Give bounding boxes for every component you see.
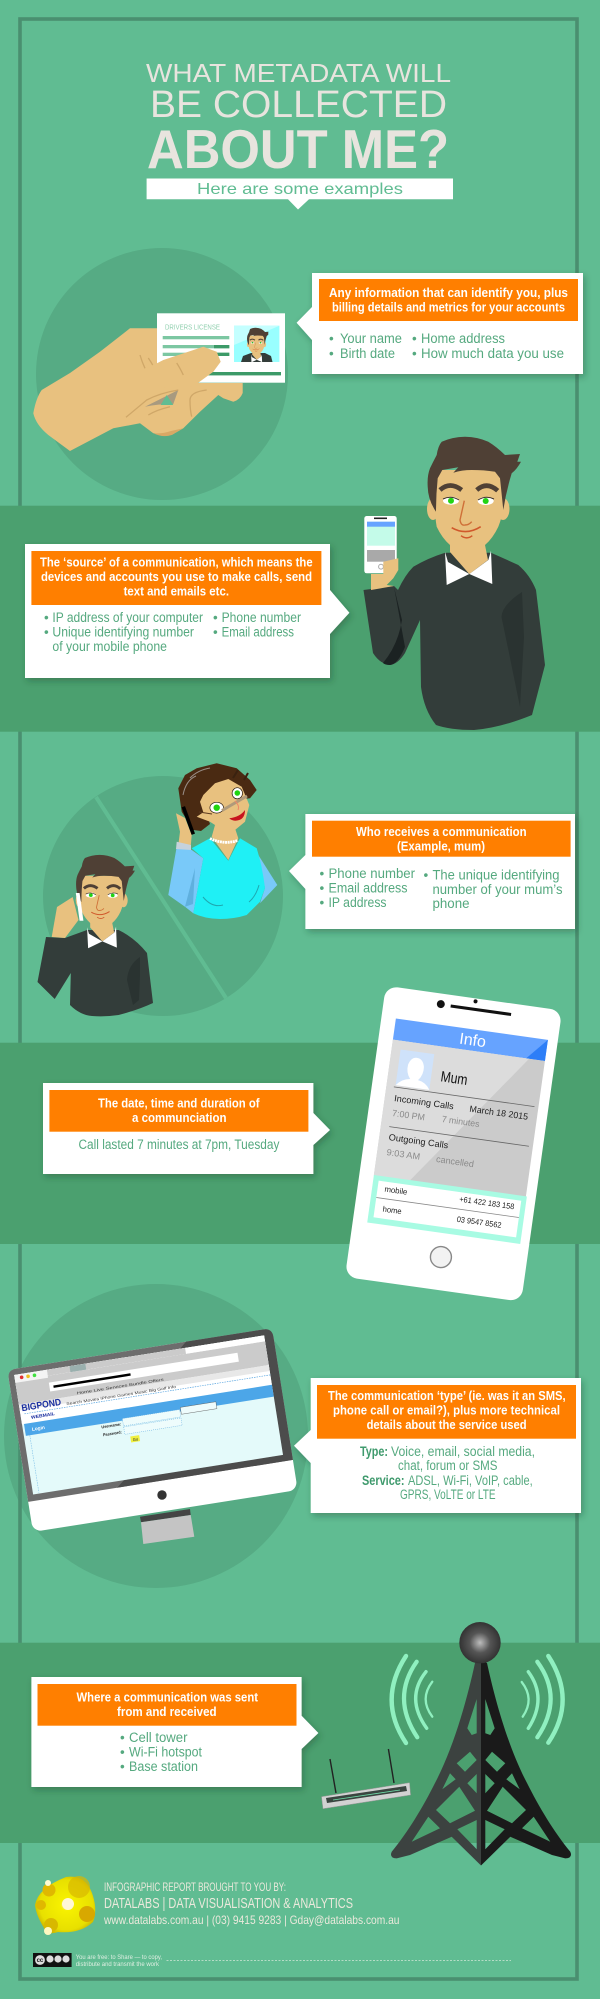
callout: recipient: phone [432, 896, 470, 911]
callout: source of communication: text and emails etc. [124, 584, 229, 598]
background circle: identity [36, 248, 288, 500]
background circle: communication type [4, 1284, 308, 1588]
callout: source of communication: • [44, 610, 49, 625]
illustration: wi-fi router [322, 1749, 411, 1809]
callout: source of communication: devices and accounts you use to make calls, send [41, 570, 312, 584]
phone held by man [364, 516, 397, 573]
callout: identifying information: Birth date [340, 346, 395, 361]
callout: identifying information: billing details and metrics for your accounts [332, 300, 565, 314]
callout: source of communication: • [44, 624, 49, 640]
callout: source of communication [25, 544, 349, 678]
callout: recipient: • [320, 895, 324, 910]
footer credits: DATALABS | DATA VISUALISATION & ANALYTICS [104, 1895, 353, 1912]
band: source [0, 506, 600, 732]
band: location [0, 1643, 600, 1843]
illustration: smartphone call log: 03 9547 8562 [456, 1215, 503, 1230]
callout: recipient: Who receives a communication [356, 825, 527, 839]
callout: recipient: number of your mum’s [432, 882, 563, 897]
callout: date, time and duration: The date, time and duration of [98, 1097, 260, 1111]
callout: location: Where a communication was sent [76, 1691, 259, 1705]
callout: location: • [120, 1744, 125, 1760]
illustration: desktop monitor with webmail login: Home Live Services Bundle Offers [77, 1378, 164, 1395]
illustration: smartphone call log: mobile [384, 1185, 408, 1197]
monitor camera [157, 1490, 167, 1500]
callout: communication type: ADSL, Wi-Fi, VoIP, cable, [408, 1473, 533, 1488]
callout: source of communication: The ‘source’ of a communication, which means the [40, 556, 313, 570]
circle divider [96, 797, 226, 998]
callout: source of communication: • [213, 610, 218, 625]
illustration: smartphone call log: 7 minutes [441, 1114, 481, 1129]
creative commons badge: cc [37, 1958, 44, 1964]
callout: source of communication: IP address of your computer [52, 610, 203, 625]
callout: identifying information: • [329, 331, 334, 346]
callout: location: • [120, 1730, 125, 1745]
title [146, 58, 451, 180]
footer credits: www.datalabs.com.au | (03) 9415 9283 | Gday@datalabs.com.au [103, 1913, 400, 1927]
illustration: mum on phone [168, 763, 277, 919]
callout: communication type: Service: [362, 1473, 404, 1488]
illustration: man on phone [38, 855, 153, 1016]
illustration: desktop monitor with webmail login [7, 1328, 298, 1532]
callout: recipient: • [424, 867, 428, 882]
callout: identifying information: Your name [340, 331, 402, 346]
illustration: desktop monitor with webmail login: Login [32, 1425, 45, 1433]
callout: date, time and duration: a communciation [132, 1111, 226, 1125]
illustration: smartphone call log: +61 422 183 158 [459, 1195, 515, 1211]
callout: location: Wi-Fi hotspot [129, 1744, 202, 1760]
callout: communication type: The communication ‘type’ (ie. was it an SMS, [328, 1389, 566, 1403]
illustration: smartphone call log [345, 986, 562, 1302]
callout: identifying information: How much data you use [421, 346, 564, 361]
title: ABOUT ME? [147, 118, 449, 180]
callout: source of communication: Phone number [222, 610, 301, 625]
licence card [157, 313, 285, 383]
illustration: man holding phone [364, 437, 545, 730]
title: BE COLLECTED [150, 84, 447, 126]
callout: identifying information: • [412, 331, 417, 346]
callout: identifying information: Home address [421, 331, 505, 346]
illustration: signal waves [392, 1656, 563, 1743]
footer credits [103, 1880, 400, 1927]
callout: communication type: chat, forum or SMS [398, 1458, 498, 1473]
callout: location: Base station [129, 1759, 198, 1774]
illustration: smartphone call log: Mum [440, 1068, 469, 1089]
illustration: hand holding driver's licence [33, 313, 285, 451]
callout: source of communication: Email address [222, 624, 294, 640]
callout: date, time and duration: Call lasted 7 minutes at 7pm, Tuesday [78, 1137, 280, 1152]
illustration: desktop monitor with webmail login: BIGPOND [21, 1397, 62, 1414]
illustration: desktop monitor with webmail login: Password: [103, 1429, 122, 1437]
callout: identifying information: • [412, 346, 417, 361]
callout: recipient: Email address [328, 881, 408, 896]
callout: communication type: Type: [360, 1444, 388, 1459]
band: date and time [0, 1043, 600, 1244]
illustration: cell tower [391, 1622, 571, 1866]
licence note [76, 1954, 162, 1968]
illustration: smartphone call log: 7:00 PM [392, 1108, 426, 1122]
subtitle banner [147, 178, 453, 210]
licence note: You are free: to Share — to copy, [76, 1954, 162, 1961]
callout: communication type: Voice, email, social media, [391, 1444, 535, 1459]
logo: Datalabs [35, 1876, 95, 1935]
footer credits: INFOGRAPHIC REPORT BROUGHT TO YOU BY: [104, 1880, 286, 1894]
callout: location [31, 1677, 318, 1787]
callout: recipient [289, 814, 575, 929]
callout: recipient: IP address [328, 895, 387, 910]
callout: communication type: phone call or email?), plus more technical [333, 1404, 560, 1418]
illustration: smartphone call log: Incoming Calls [394, 1093, 455, 1111]
creative commons badge [33, 1953, 72, 1967]
illustration: monitor stand [140, 1509, 194, 1544]
illustration: smartphone call log: home [382, 1205, 403, 1216]
callout: communication type: GPRS, VoLTE or LTE [400, 1487, 496, 1502]
callout: recipient: (Example, mum) [397, 840, 485, 854]
title: WHAT METADATA WILL [146, 58, 451, 88]
callout: communication type [294, 1378, 581, 1513]
callout: location: from and received [117, 1705, 217, 1719]
licence card: DRIVERS LICENSE [165, 322, 220, 331]
illustration: smartphone call log: cancelled [436, 1154, 475, 1169]
callout: source of communication: of your mobile phone [52, 639, 167, 654]
illustration: smartphone call log: Outgoing Calls [388, 1132, 449, 1150]
callout: recipient: • [320, 881, 324, 896]
illustration: desktop monitor with webmail login: Search Movies iPhone Games Music Big Golf Info [66, 1385, 176, 1406]
background circle: recipient [43, 776, 283, 1016]
illustration: smartphone call log: March 18 2015 [469, 1104, 529, 1122]
illustration: smartphone call log: Info [458, 1031, 487, 1051]
subtitle banner: Here are some examples [197, 181, 403, 198]
callout: location: • [120, 1759, 125, 1774]
illustration: smartphone call log: 9:03 AM [386, 1147, 421, 1162]
callout: location: Cell tower [129, 1730, 188, 1745]
callout: date, time and duration [43, 1083, 330, 1174]
callout: identifying information: Any information that can identify you, plus [329, 286, 568, 300]
callout: identifying information [297, 273, 583, 374]
illustration: desktop monitor with webmail login: Go [132, 1436, 139, 1442]
callout: source of communication: • [213, 624, 218, 640]
callout: recipient: • [320, 866, 324, 881]
callout: recipient: Phone number [328, 866, 415, 881]
callout: identifying information: • [329, 346, 334, 361]
callout: source of communication: Unique identifying number [52, 624, 194, 640]
illustration: desktop monitor with webmail login: WEBMAIL [31, 1411, 55, 1420]
callout: communication type: details about the service used [367, 1418, 527, 1432]
illustration: desktop monitor with webmail login: Username: [101, 1421, 122, 1429]
licence note: distribute and transmit the work [76, 1961, 160, 1968]
callout: recipient: The unique identifying [432, 867, 560, 882]
